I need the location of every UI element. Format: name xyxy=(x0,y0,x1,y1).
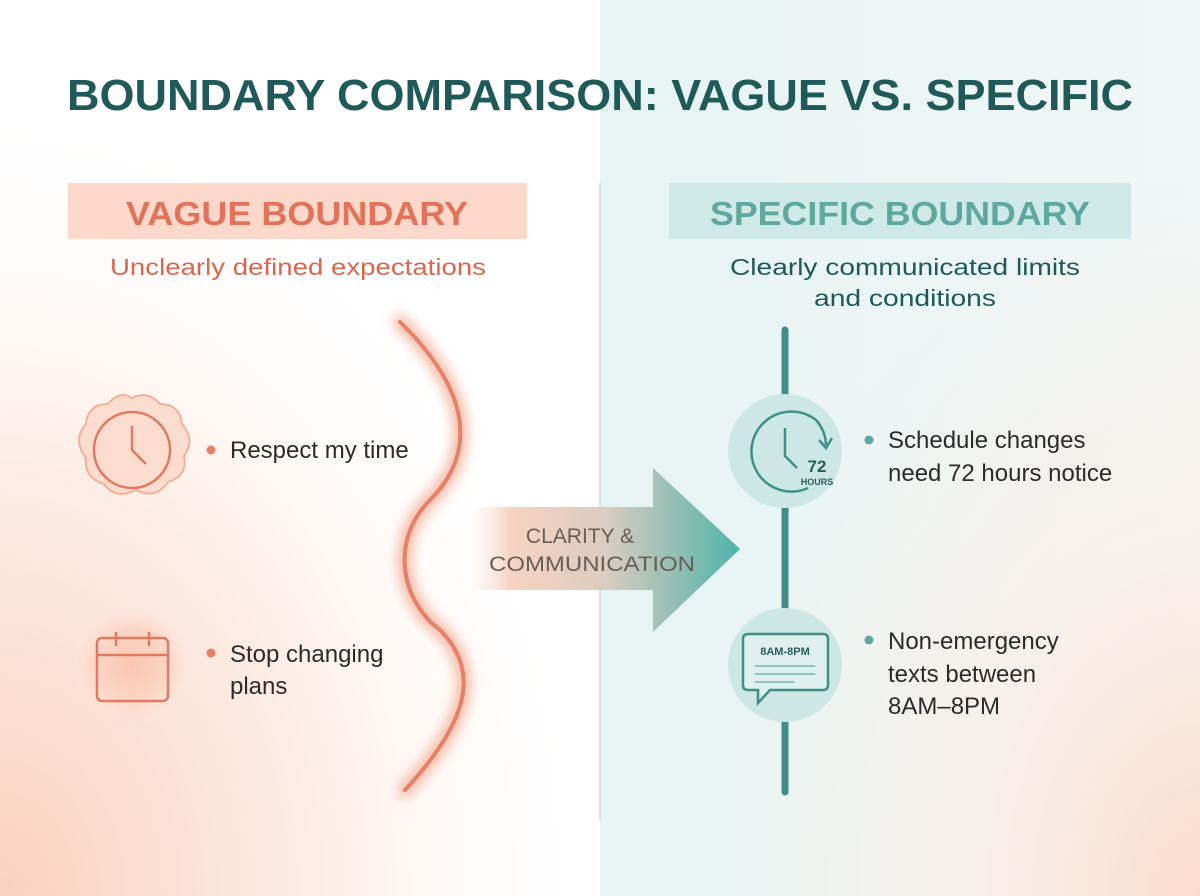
item: non-emergency texts xyxy=(864,628,1059,720)
icon: 8am-8pm chat xyxy=(728,608,842,722)
item: stop changing plans: plans xyxy=(230,673,287,700)
item: non-emergency texts: Non-emergency xyxy=(888,628,1059,655)
arrow: clarity & communication: COMMUNICATION xyxy=(489,553,695,576)
icon: 72 hours clock: 72 xyxy=(808,457,826,476)
subtitle: vague: Unclearly defined expectations xyxy=(110,254,486,280)
timeline specific xyxy=(782,330,788,792)
heading: specific boundary: SPECIFIC BOUNDARY xyxy=(710,195,1090,232)
icon: 72 hours clock: HOURS xyxy=(801,477,833,487)
icon: 8am-8pm chat: 8AM-8PM xyxy=(760,646,810,658)
heading: vague boundary xyxy=(68,183,527,239)
heading: vague boundary: VAGUE BOUNDARY xyxy=(126,195,468,232)
wavy vague line xyxy=(400,322,464,790)
arrow: clarity & communication: CLARITY & xyxy=(526,525,634,548)
item: stop changing plans: Stop changing xyxy=(230,641,383,668)
item: schedule changes: need 72 hours notice xyxy=(888,460,1112,487)
item: stop changing plans xyxy=(206,641,383,700)
icon: vague calendar xyxy=(70,603,194,727)
subtitle: specific xyxy=(730,254,1080,311)
arrow: clarity & communication xyxy=(470,468,740,632)
item: schedule changes xyxy=(864,427,1112,487)
subtitle: specific: Clearly communicated limits xyxy=(730,254,1080,280)
item: respect my time: Respect my time xyxy=(230,437,409,464)
item: schedule changes: Schedule changes xyxy=(888,427,1085,454)
title: BOUNDARY COMPARISON: VAGUE VS. SPECIFIC xyxy=(67,71,1133,120)
subtitle: specific: and conditions xyxy=(814,285,996,311)
item: non-emergency texts: 8AM–8PM xyxy=(888,693,1000,720)
item: non-emergency texts: texts between xyxy=(888,661,1036,688)
icon: 72 hours clock xyxy=(728,394,842,508)
heading: specific boundary xyxy=(669,183,1131,239)
icon: vague clock xyxy=(79,395,190,494)
